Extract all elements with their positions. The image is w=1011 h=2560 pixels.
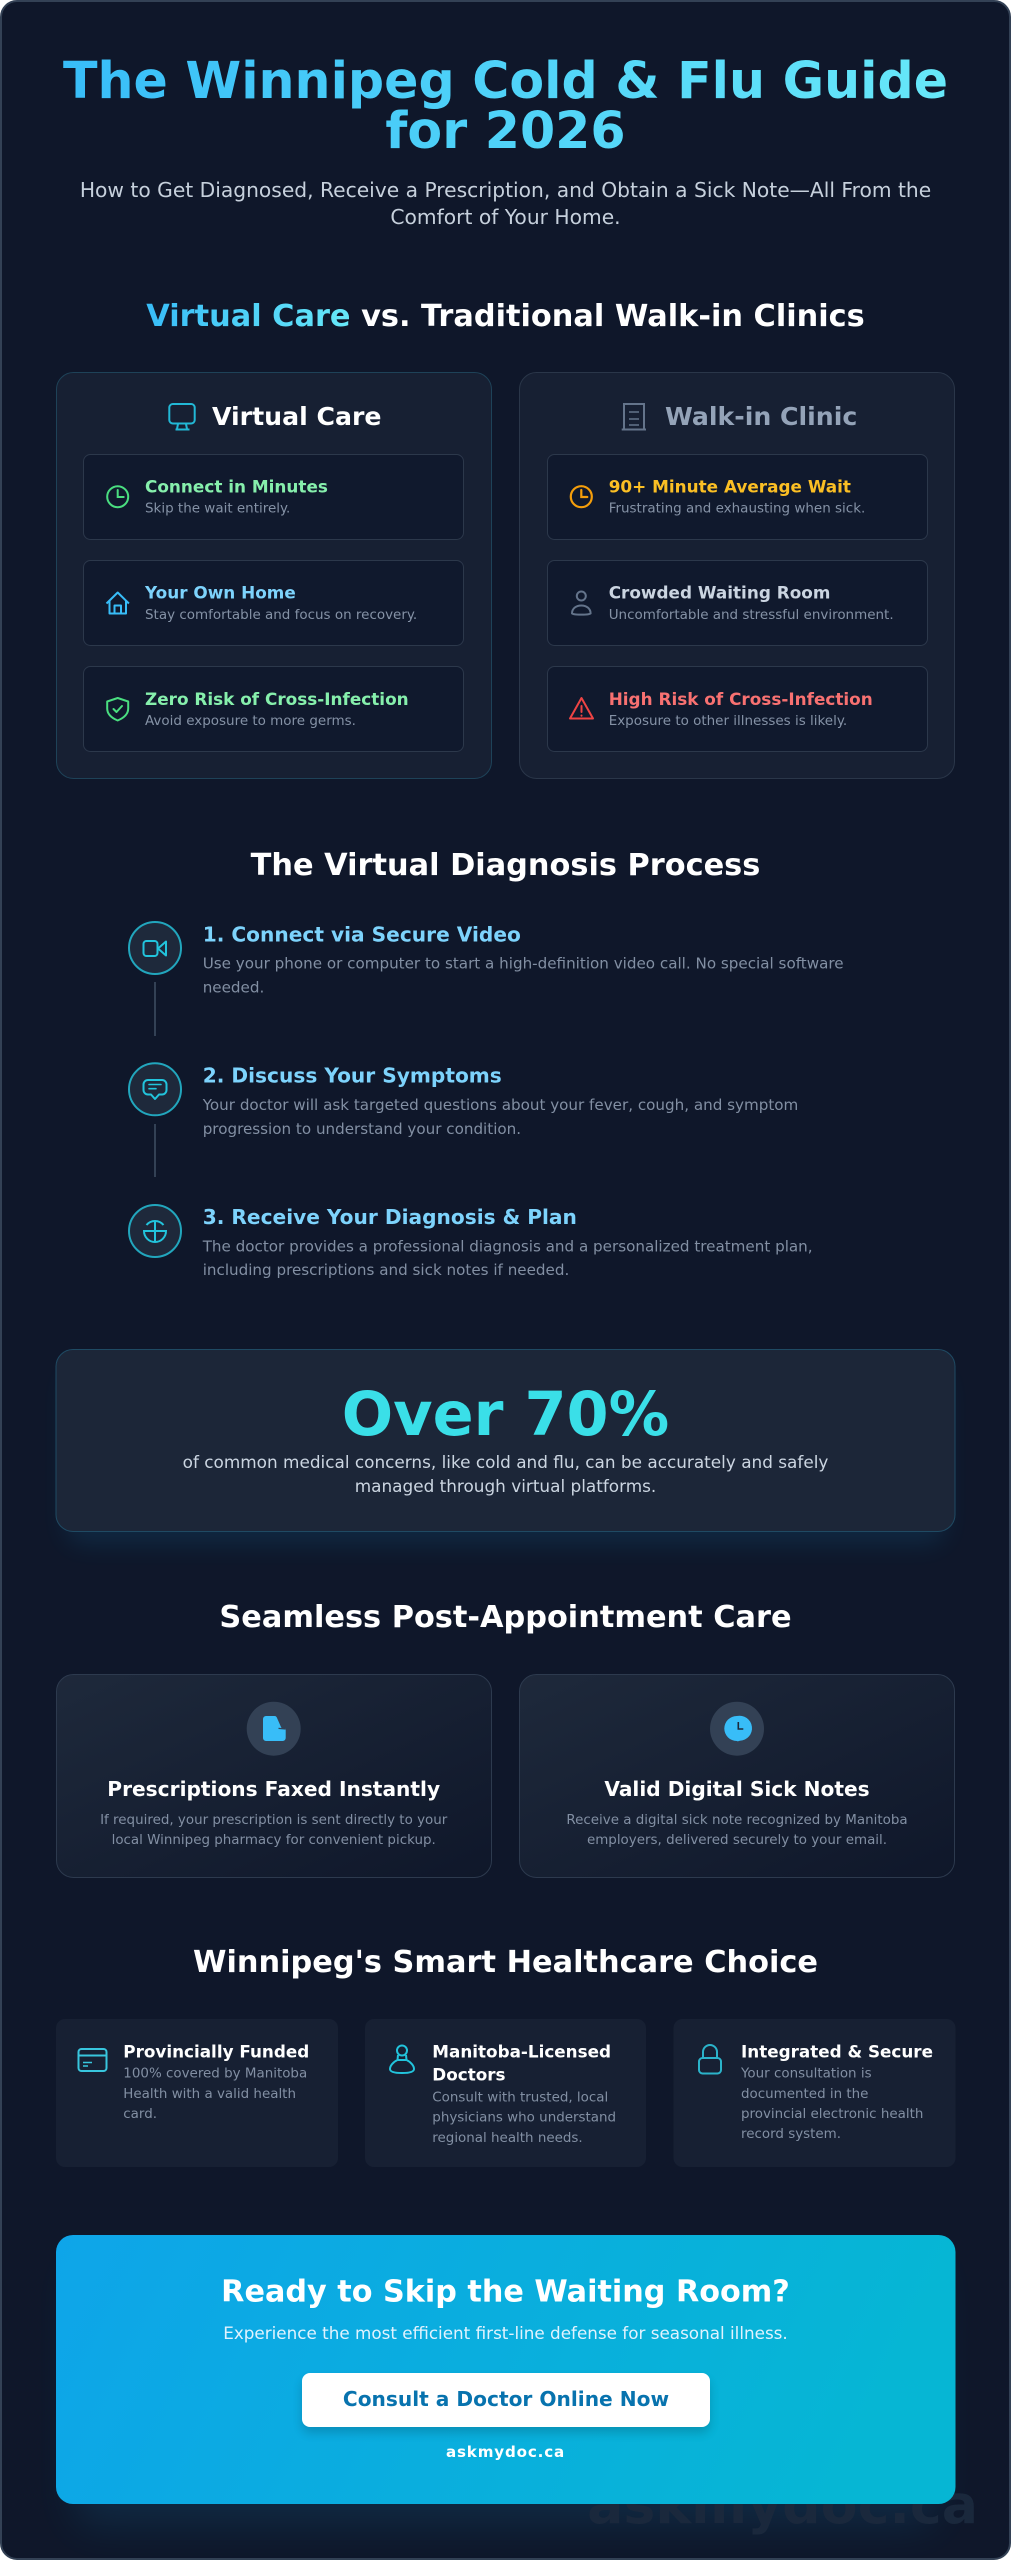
- step 1: needed.: [203, 978, 264, 996]
- card: prescriptions: Prescriptions Faxed Instantly: [107, 1777, 440, 1801]
- icon: lock: [699, 2045, 721, 2074]
- panel: call to action: [56, 2235, 956, 2504]
- stat glow: [66, 1372, 945, 1544]
- icon: chat: [129, 1063, 181, 1115]
- step 1: Use your phone or computer to start a high-definition video call. No special software: [203, 955, 844, 973]
- card: prescriptions: [56, 1674, 492, 1878]
- panel: stat: Over 70%: [342, 1380, 669, 1450]
- panel: call to action: askmydoc.ca: [446, 2443, 565, 2461]
- title: The Winnipeg Cold & Flu Guide: [63, 51, 948, 110]
- item: zero risk: Avoid exposure to more germs.: [145, 713, 356, 729]
- card: provincially funded: Health with a valid health: [123, 2087, 296, 2102]
- step 1: 1. Connect via Secure Video: [203, 922, 521, 946]
- button: [302, 2373, 710, 2427]
- panel: stat: [56, 1350, 955, 1532]
- item: crowded waiting room: Crowded Waiting Room: [609, 583, 830, 603]
- item: average wait: 90+ Minute Average Wait: [609, 477, 851, 497]
- item: high risk: Exposure to other illnesses is likely.: [609, 713, 847, 729]
- icon: card: [78, 2049, 106, 2071]
- step 3: The doctor provides a professional diagnosis and a personalized treatment plan,: [202, 1238, 813, 1256]
- heading: smart choice: Winnipeg's Smart Healthcare Choice: [193, 1945, 818, 1980]
- card: licensed doctors: Manitoba-Licensed: [432, 2041, 611, 2061]
- item: zero risk: Zero Risk of Cross-Infection: [145, 689, 409, 709]
- card: provincially funded: 100% covered by Manitoba: [123, 2067, 307, 2082]
- item: zero risk: [84, 666, 464, 752]
- card: sick notes: Valid Digital Sick Notes: [604, 1777, 870, 1801]
- card: licensed doctors: Consult with trusted, local: [432, 2090, 608, 2105]
- item: connect in minutes: Connect in Minutes: [145, 477, 328, 497]
- card: integrated secure: documented in the: [741, 2087, 868, 2102]
- icon: document: [247, 1702, 301, 1756]
- card: sick notes: employers, delivered securely to your email.: [587, 1833, 887, 1848]
- card: sick notes: [520, 1674, 954, 1878]
- card: integrated secure: [674, 2019, 956, 2167]
- title: for 2026: [385, 101, 626, 160]
- item: crowded waiting room: [548, 560, 928, 646]
- card: prescriptions: local Winnipeg pharmacy for convenient pickup.: [112, 1833, 436, 1848]
- card: provincially funded: Provincially Funded: [123, 2041, 309, 2061]
- subtitle: How to Get Diagnosed, Receive a Prescription, and Obtain a Sick Note—All From the: [80, 178, 931, 202]
- card: provincially funded: card.: [123, 2107, 157, 2122]
- heading: post-appointment: Seamless Post-Appointment Care: [219, 1600, 792, 1635]
- card: licensed doctors: regional health needs.: [432, 2131, 583, 2146]
- step 3: including prescriptions and sick notes if needed.: [203, 1261, 569, 1279]
- item: high risk: [548, 666, 928, 752]
- panel: stat: managed through virtual platforms.: [355, 1476, 656, 1496]
- step 2: 2. Discuss Your Symptoms: [203, 1064, 502, 1088]
- item: connect in minutes: [84, 454, 464, 540]
- panel: call to action: Experience the most efficient first-line defense for seasonal illness.: [223, 2323, 788, 2343]
- item: high risk: High Risk of Cross-Infection: [609, 689, 873, 709]
- card: licensed doctors: physicians who understand: [432, 2111, 616, 2126]
- button: Consult a Doctor Online Now: [343, 2387, 669, 2411]
- card: provincially funded: [56, 2019, 338, 2167]
- title: [63, 51, 948, 160]
- heading: process: The Virtual Diagnosis Process: [251, 848, 760, 883]
- item: average wait: Frustrating and exhausting when sick.: [609, 501, 865, 517]
- step 2: [129, 1063, 798, 1138]
- panel: virtual care: [56, 372, 492, 778]
- cta glow: [76, 2265, 935, 2525]
- card: integrated secure: Your consultation is: [740, 2067, 872, 2082]
- icon: monitor: [169, 404, 195, 430]
- item: your own home: [84, 560, 464, 646]
- heading: comparison: Virtual Care vs. Traditional Walk-in Clinics: [146, 299, 865, 334]
- step 2: Your doctor will ask targeted questions about your fever, cough, and symptom: [202, 1096, 798, 1114]
- card: integrated secure: record system.: [741, 2127, 841, 2142]
- card: licensed doctors: Doctors: [432, 2065, 506, 2085]
- subtitle: [80, 178, 931, 229]
- panel heading: virtual care: Virtual Care: [212, 402, 381, 431]
- step 3: 3. Receive Your Diagnosis & Plan: [203, 1205, 577, 1229]
- watermark: askmydoc.ca: [587, 2473, 978, 2536]
- card: prescriptions: If required, your prescription is sent directly to your: [100, 1813, 448, 1828]
- icon: hospital building: [622, 404, 646, 430]
- icon: diagnosis: [129, 1205, 181, 1257]
- item: average wait: [548, 454, 928, 540]
- panel: call to action: Ready to Skip the Waiting Room?: [221, 2275, 790, 2310]
- step 2: progression to understand your condition.: [203, 1120, 521, 1138]
- card: integrated secure: Integrated & Secure: [741, 2041, 933, 2061]
- panel: walk-in clinic: [520, 372, 954, 778]
- item: your own home: Stay comfortable and focus on recovery.: [145, 607, 417, 623]
- icon: clock: [710, 1702, 764, 1756]
- panel: stat: of common medical concerns, like cold and flu, can be accurately and safely: [183, 1452, 828, 1472]
- step 3: [129, 1205, 813, 1279]
- card: integrated secure: provincial electronic health: [741, 2107, 923, 2122]
- panel heading: walk-in clinic: Walk-in Clinic: [665, 402, 857, 431]
- icon: video: [129, 922, 181, 974]
- card: licensed doctors: [365, 2019, 646, 2167]
- card: sick notes: Receive a digital sick note recognized by Manitoba: [566, 1813, 908, 1828]
- item: your own home: Your Own Home: [144, 583, 296, 603]
- subtitle: Comfort of Your Home.: [390, 205, 621, 229]
- item: connect in minutes: Skip the wait entirely.: [145, 501, 290, 517]
- item: crowded waiting room: Uncomfortable and stressful environment.: [609, 607, 894, 623]
- step 1: [129, 922, 844, 996]
- icon: doctor: [390, 2046, 414, 2073]
